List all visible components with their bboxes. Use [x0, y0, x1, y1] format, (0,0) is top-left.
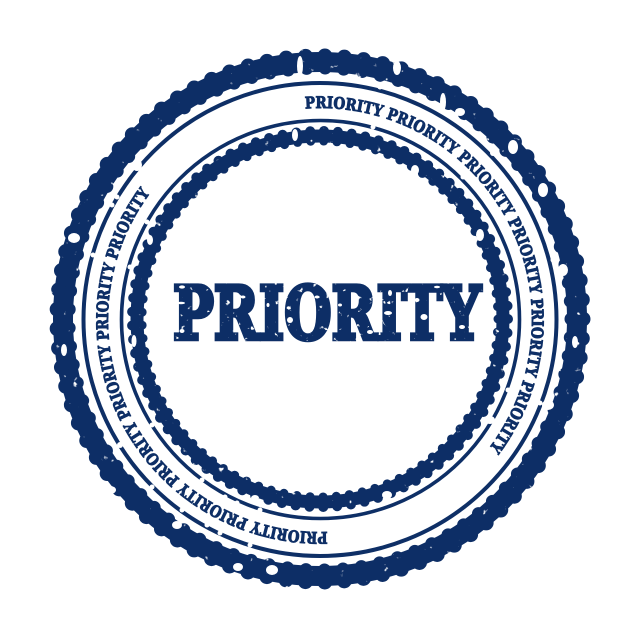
- outer thin ring: [84, 83, 556, 556]
- inner scalloped band: [132, 131, 508, 507]
- title: PRIORITY: [173, 271, 482, 357]
- worn patches on the rings: [61, 56, 578, 575]
- circular text: second arc: PRIORITY PRIORITY PRIORITY PRIORITY PRIORITY PRIORITY: [96, 186, 328, 544]
- inner thin ring: [122, 120, 520, 518]
- outer scalloped band: [57, 56, 583, 582]
- circular text: first arc: PRIORITY PRIORITY PRIORITY PRIORITY PRIORITY PRIORITY: [304, 96, 544, 456]
